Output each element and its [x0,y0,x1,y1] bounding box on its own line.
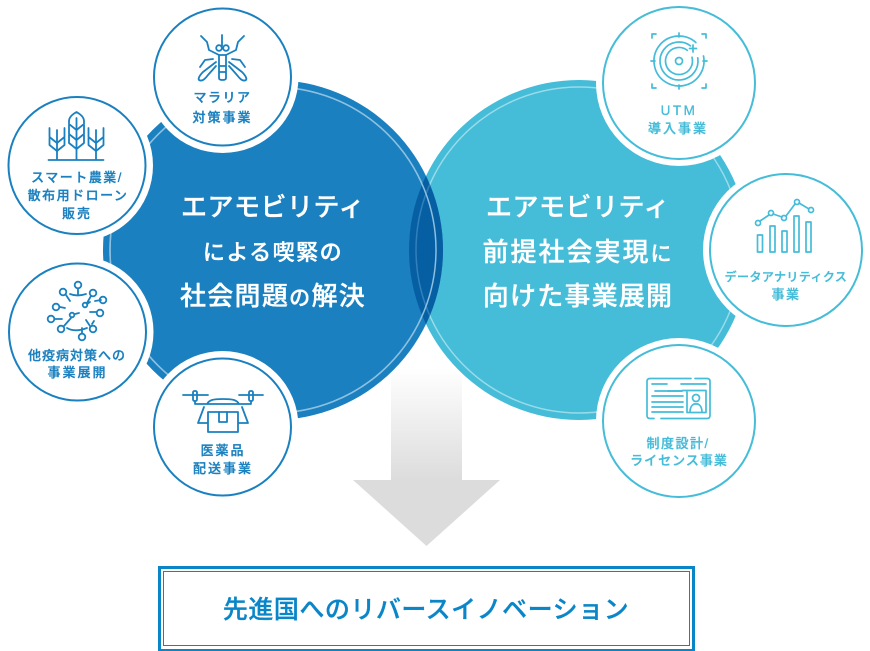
panel: malaria: 対策事業 [192,110,253,125]
icon: license card [647,378,710,418]
panel: right large circle [409,80,749,420]
label: 制度設計/ [646,436,710,451]
panel: smart agriculture: 散布用ドローン [28,188,128,203]
heading: left circle: 社会問題の解決 [180,281,366,311]
label: 他疫病対策への [28,348,126,363]
panel: regulation and license: ライセンス事業 [630,453,728,468]
heading: right circle: エアモビリティ [486,192,670,222]
icon: wheat [48,112,104,160]
panel: drone delivery [146,351,298,503]
heading: right circle [482,192,674,311]
panel: data analytics: 事業 [771,287,801,302]
label: スマート農業/ [31,170,123,185]
icon: virus [48,282,106,340]
panel: drone delivery: 配送事業 [193,461,253,476]
callout: reverse innovation: 先進国へのリバースイノベーション [223,596,629,624]
arrow down [353,368,500,546]
callout: reverse innovation [160,568,694,650]
panel: malaria [146,1,298,153]
heading: right circle: 前提社会実現に [482,237,674,267]
panel: left large circle [103,80,443,420]
icon: bar and line chart [756,200,814,252]
panel: UTM [596,0,762,166]
panel: infectious disease [2,256,154,408]
label: マラリア [193,90,252,105]
panel: regulation and license [596,338,762,504]
heading: left circle: エアモビリティ [181,192,365,222]
overlap of circles [109,88,443,412]
label: 医薬品 [200,443,246,458]
icon: mosquito [199,35,246,81]
label: データアナリティクス [725,269,847,284]
icon: drone [183,391,263,432]
icon: UTM target [650,32,708,90]
panel: UTM: 導入事業 [648,121,708,136]
label: UTM [661,103,697,118]
panel: data analytics [703,167,869,333]
panel: infectious disease: 事業展開 [47,365,108,380]
heading: left circle: による喫緊の [203,240,343,265]
heading: right circle: 向けた事業展開 [483,281,673,311]
panel: smart agriculture [1,90,153,242]
heading: left circle [180,192,366,311]
panel: smart agriculture: 販売 [62,206,92,221]
